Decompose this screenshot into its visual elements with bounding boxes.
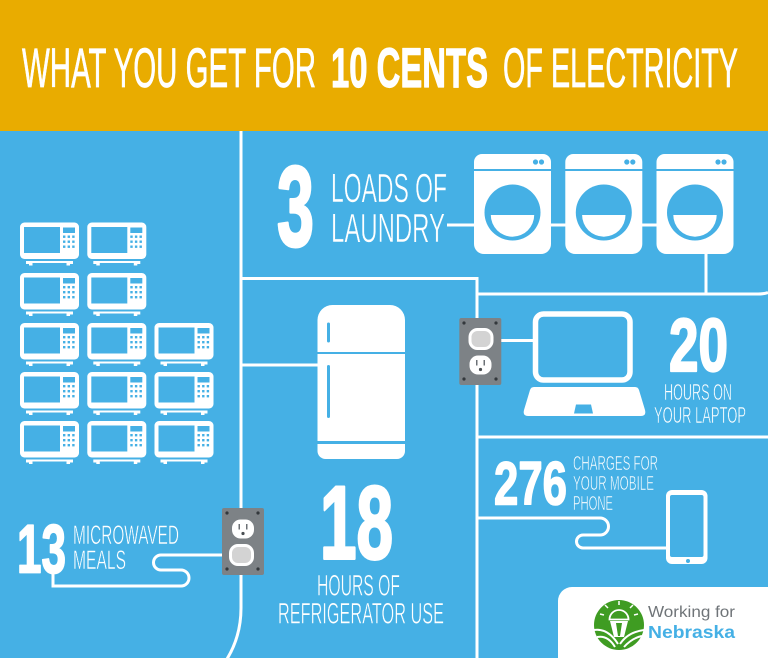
icons: washing machines (474, 154, 734, 254)
phone label: CHARGES FOR (573, 453, 658, 475)
microwave label: MEALS (73, 545, 126, 575)
refrigerator label: REFRIGERATOR USE (278, 598, 444, 630)
icon: lightbulb logo (594, 600, 644, 650)
microwave cord (53, 555, 232, 586)
panel: logo card (558, 587, 768, 658)
title: 10 CENTS (331, 36, 488, 99)
laundry label: LAUNDRY (331, 205, 445, 251)
logo text: Nebraska (648, 622, 735, 642)
laundry label (331, 165, 447, 251)
phone label (573, 453, 658, 515)
icons: 13 microwaves (20, 222, 214, 464)
laptop label (654, 379, 746, 428)
microwave label (73, 520, 179, 575)
refrigerator label (278, 570, 444, 630)
logo text (648, 604, 735, 642)
icon: left wall outlet (222, 508, 264, 575)
logo text: Working for (648, 604, 735, 621)
number 276: 276 (494, 450, 567, 518)
panel: mobile phone (477, 450, 708, 564)
laptop cord (492, 339, 534, 342)
title: WHAT YOU GET FOR (22, 36, 316, 99)
icon: laptop (524, 314, 645, 416)
icon: refrigerator (318, 305, 405, 459)
number 20: 20 (669, 303, 728, 387)
number 3: 3 (277, 144, 314, 270)
header banner (0, 0, 768, 131)
number 18: 18 (320, 466, 393, 582)
microwave label: MICROWAVED (73, 520, 179, 550)
number 13: 13 (17, 510, 66, 588)
icon: right wall outlet (459, 318, 501, 385)
panel: laundry (277, 144, 734, 270)
phone label: PHONE (573, 493, 613, 515)
icon: mobile phone (666, 490, 708, 564)
phone label: YOUR MOBILE (573, 473, 654, 495)
panel: laptop (459, 303, 746, 428)
laundry label: LOADS OF (331, 165, 447, 211)
panel: refrigerator (278, 305, 444, 630)
circuit lines (227, 131, 768, 658)
refrigerator label: HOURS OF (317, 570, 400, 602)
phone cord (477, 518, 668, 548)
panel: microwaves (17, 222, 264, 588)
